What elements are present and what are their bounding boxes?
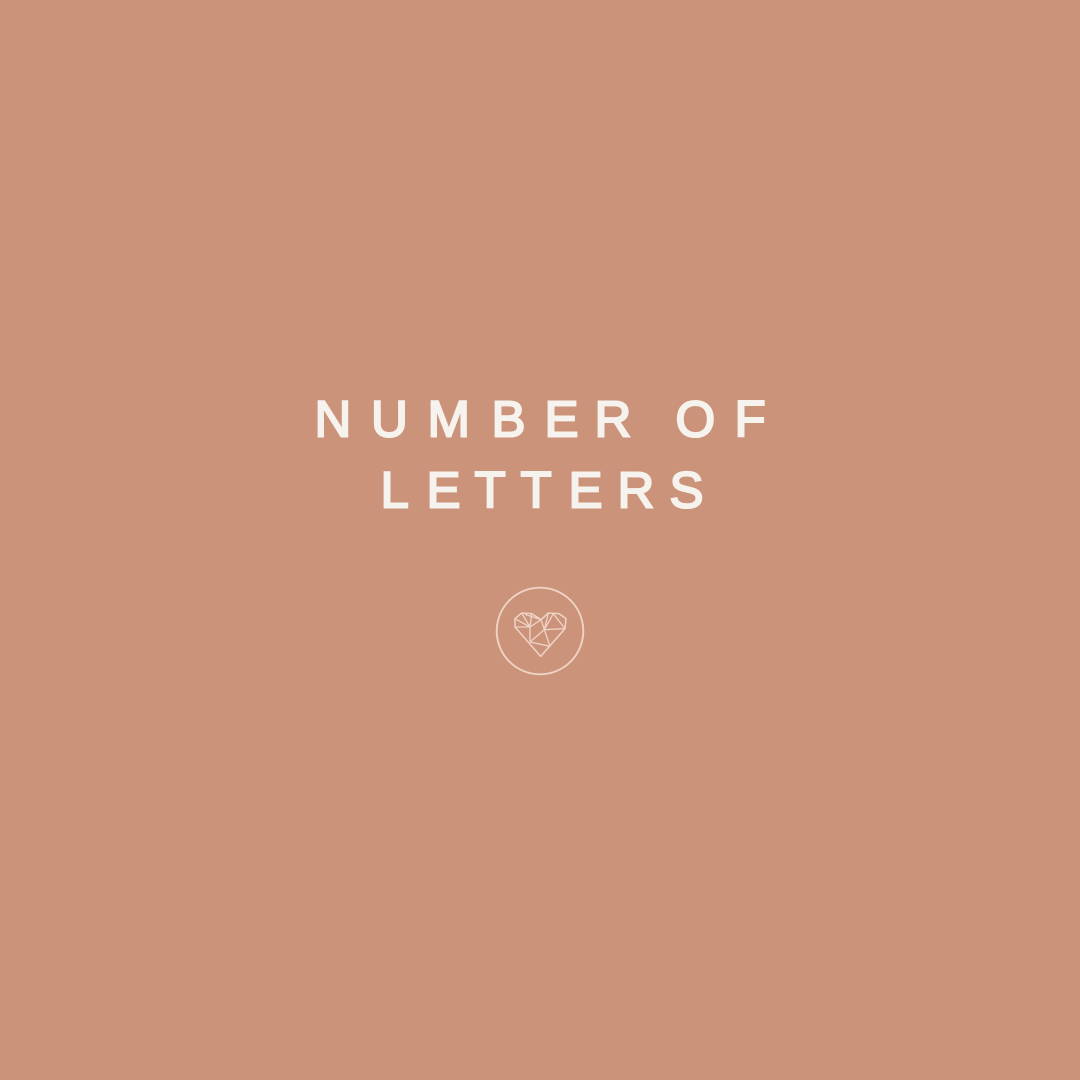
title: L bbox=[380, 462, 409, 518]
title bbox=[314, 390, 766, 518]
title: T bbox=[520, 462, 552, 518]
title: F bbox=[734, 390, 766, 448]
title: T bbox=[474, 462, 506, 518]
title: R bbox=[594, 390, 631, 448]
icon: heart in circle bbox=[497, 588, 583, 674]
title: N bbox=[314, 390, 351, 448]
title: U bbox=[371, 390, 408, 448]
title: E bbox=[544, 390, 579, 448]
title: E bbox=[568, 462, 603, 518]
title: M bbox=[428, 390, 470, 448]
title: O bbox=[676, 390, 715, 448]
title: S bbox=[670, 462, 704, 518]
title: R bbox=[618, 462, 654, 518]
title: B bbox=[492, 390, 526, 448]
title: E bbox=[426, 462, 461, 518]
